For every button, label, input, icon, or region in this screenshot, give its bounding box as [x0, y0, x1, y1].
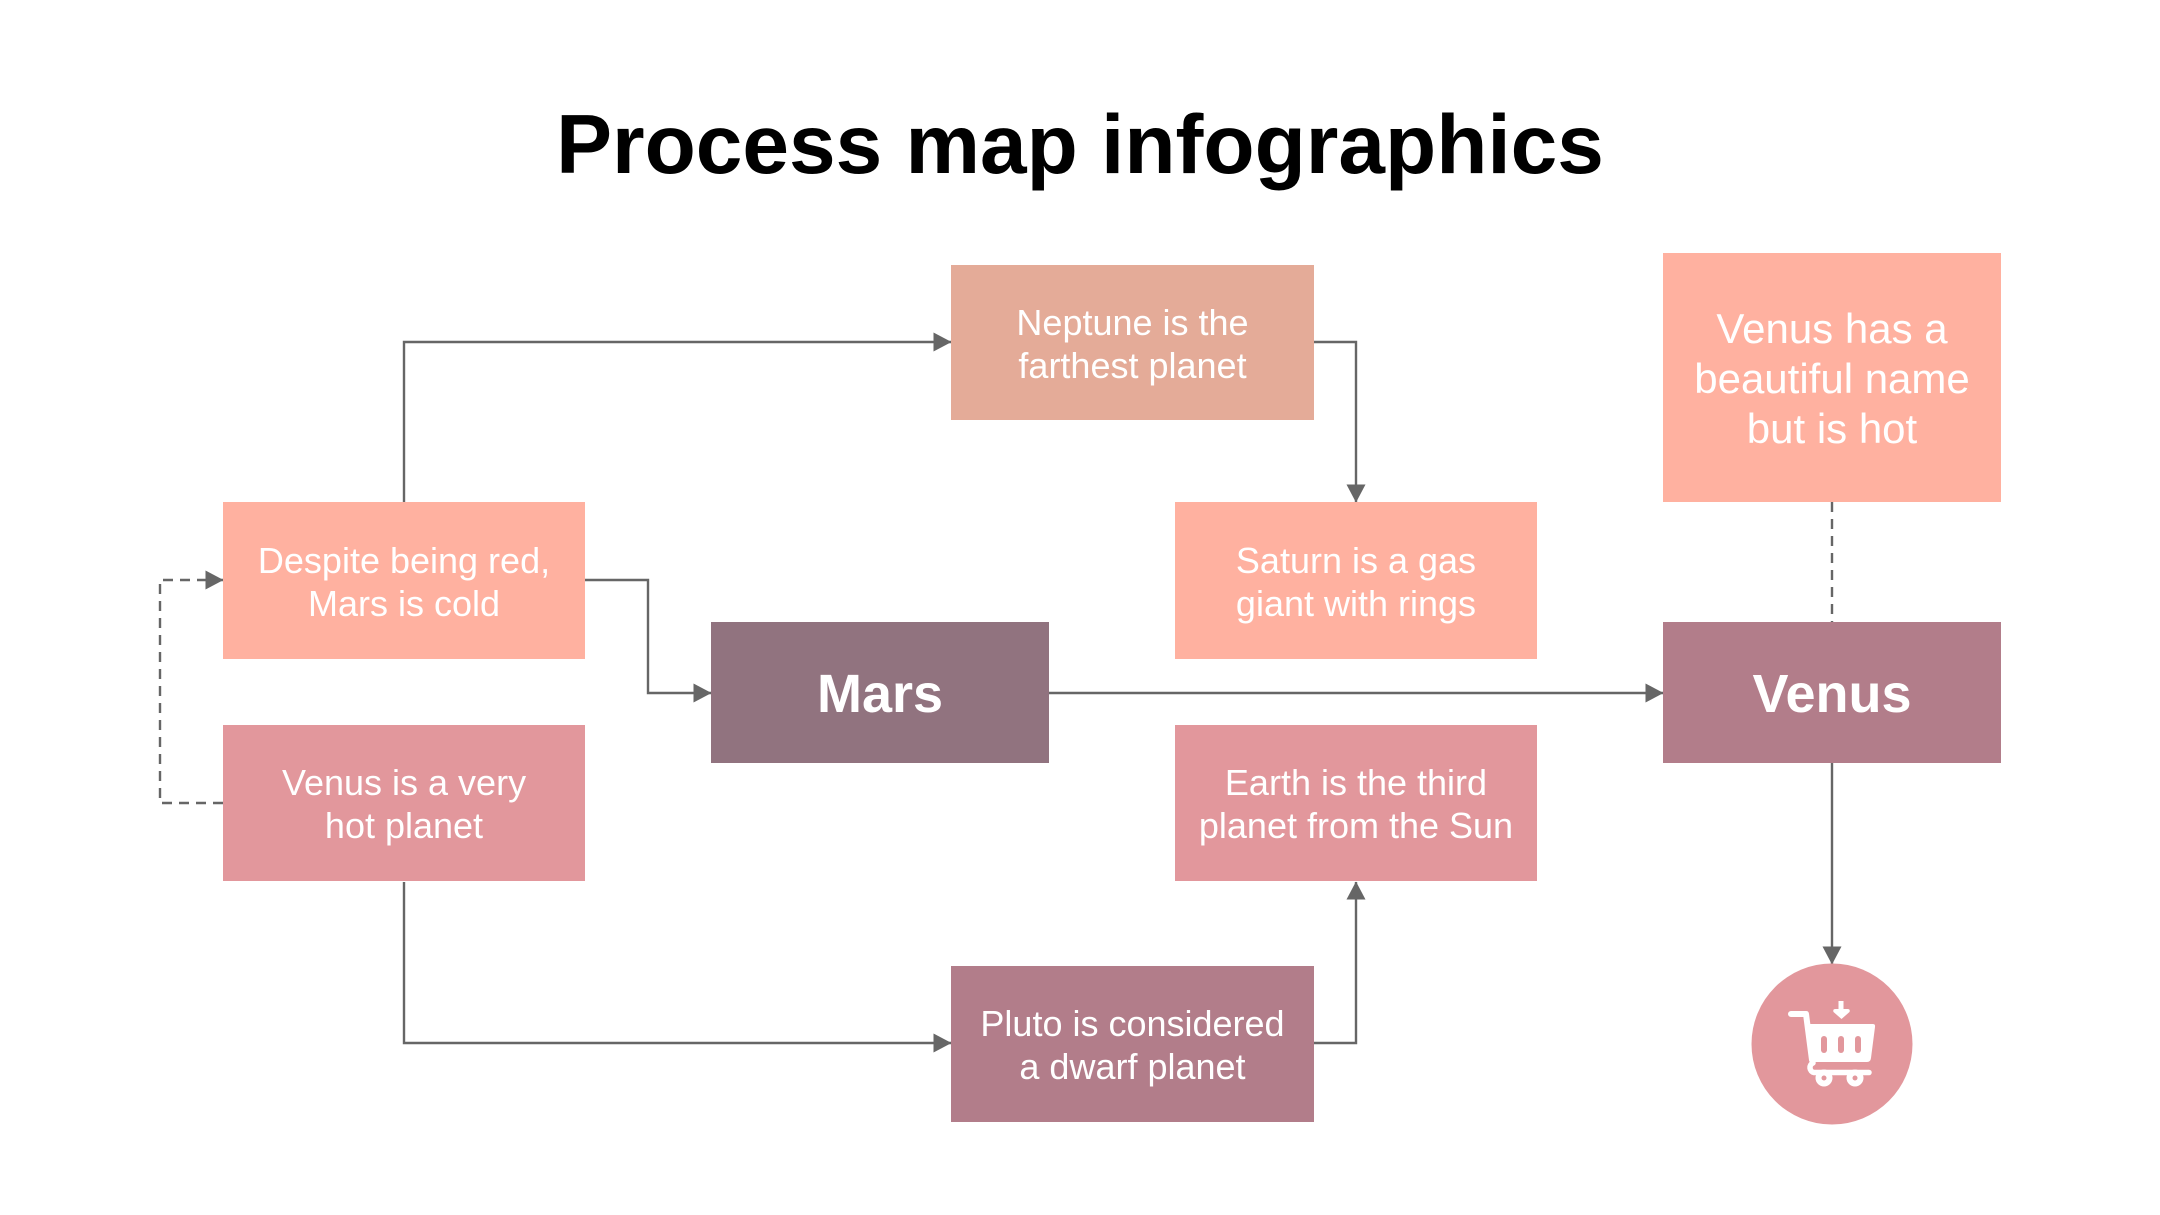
box: Venus is a very hot planet: Venus is a very — [282, 762, 526, 803]
box: Venus description: Venus has a — [1716, 304, 1948, 352]
box: Saturn: giant with rings — [1236, 582, 1476, 624]
box: Neptune — [951, 265, 1314, 420]
box: Earth — [1175, 725, 1537, 881]
box: Despite being red — [223, 502, 585, 659]
box: Saturn: Saturn is a gas — [1236, 540, 1476, 580]
box: Pluto — [951, 966, 1314, 1122]
box: Neptune: Neptune is the — [1016, 302, 1249, 342]
title: Process map infographics — [556, 97, 1604, 191]
box: Neptune: farthest planet — [1018, 344, 1247, 386]
box: Pluto: Pluto is considered — [980, 1003, 1285, 1044]
box: Saturn — [1175, 502, 1537, 659]
box: Earth: Earth is the third — [1225, 762, 1487, 803]
box: Venus: Venus — [1752, 664, 1912, 724]
box: Venus description: but is hot — [1747, 404, 1917, 452]
box: Venus — [1663, 622, 2001, 763]
box: Mars: Mars — [817, 664, 943, 724]
box: Pluto: a dwarf planet — [1019, 1046, 1246, 1087]
box: Venus description — [1663, 253, 2001, 502]
box: Mars — [711, 622, 1049, 763]
box: Despite being red: Despite being red, — [258, 540, 550, 580]
box: Earth: planet from the Sun — [1199, 805, 1513, 846]
box: Venus is a very hot planet: hot planet — [325, 805, 483, 846]
box: Venus is a very hot planet — [223, 725, 585, 881]
box: Despite being red: Mars is cold — [308, 582, 500, 624]
box: Venus description: beautiful name — [1694, 354, 1970, 402]
